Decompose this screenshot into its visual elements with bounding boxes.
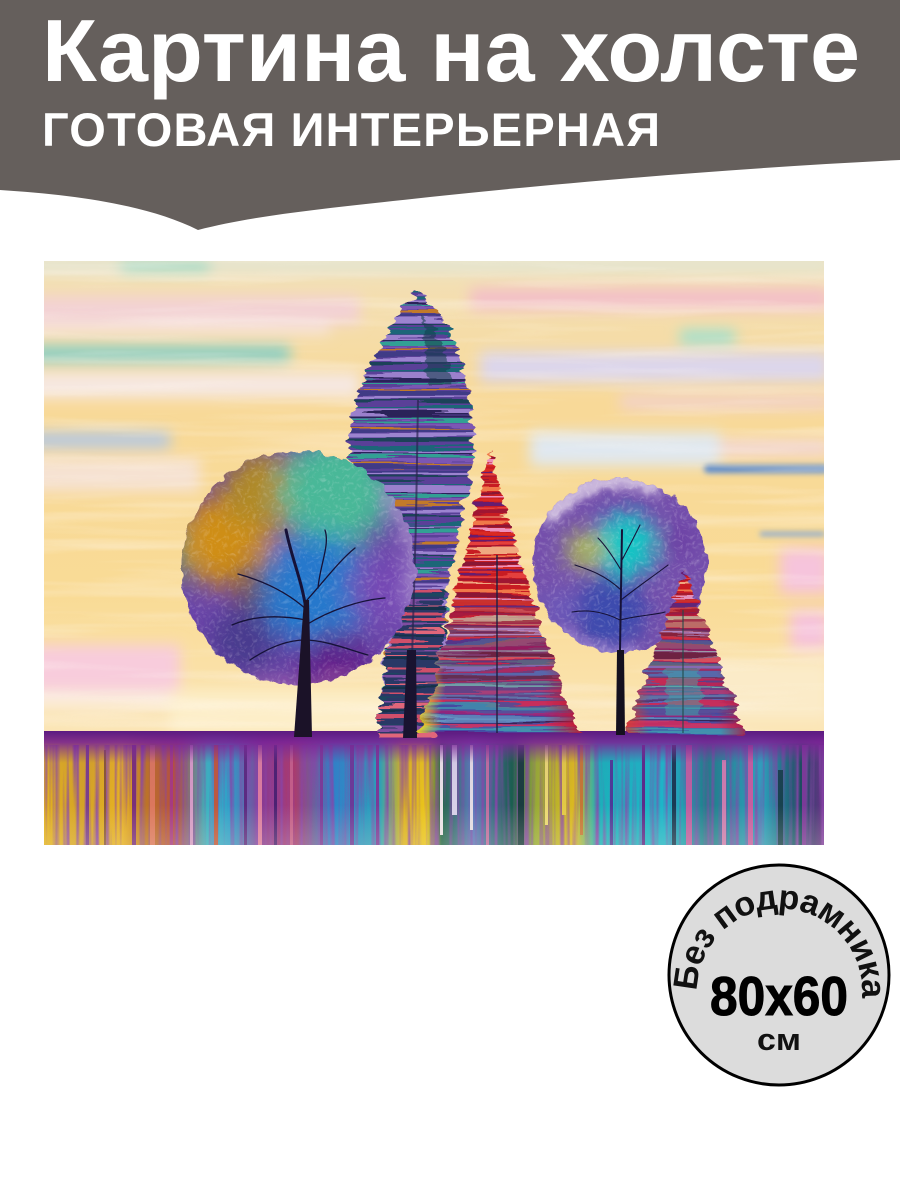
stem: [412, 400, 418, 660]
size value: 80x60: [710, 965, 848, 1027]
small triangular tree: [625, 570, 745, 733]
subtitle: ГОТОВАЯ ИНТЕРЬЕРНАЯ: [42, 103, 660, 156]
title: Картина на холсте: [42, 1, 860, 100]
painted sky: [30, 258, 830, 741]
size badge: [668, 864, 890, 1086]
trunk and branches: [232, 530, 385, 660]
blue brush strokes: [704, 465, 829, 536]
round tree, left: [180, 450, 418, 737]
painting: colourful trees on canvas: [30, 258, 830, 845]
red triangular tree: [420, 450, 578, 733]
tall cypress tree: [349, 292, 474, 738]
trunk and branches: [572, 525, 668, 650]
round tree, right: [525, 470, 715, 735]
dark teal shading: [422, 318, 452, 385]
badge circle: [669, 865, 889, 1085]
header banner: [0, 0, 900, 230]
ground: dripping colour field: [44, 731, 824, 845]
stem: [496, 555, 498, 733]
curved label: Без подрамника: [673, 890, 880, 998]
unit: см: [757, 1022, 801, 1057]
trunk: [403, 650, 417, 738]
stem: [682, 610, 684, 733]
